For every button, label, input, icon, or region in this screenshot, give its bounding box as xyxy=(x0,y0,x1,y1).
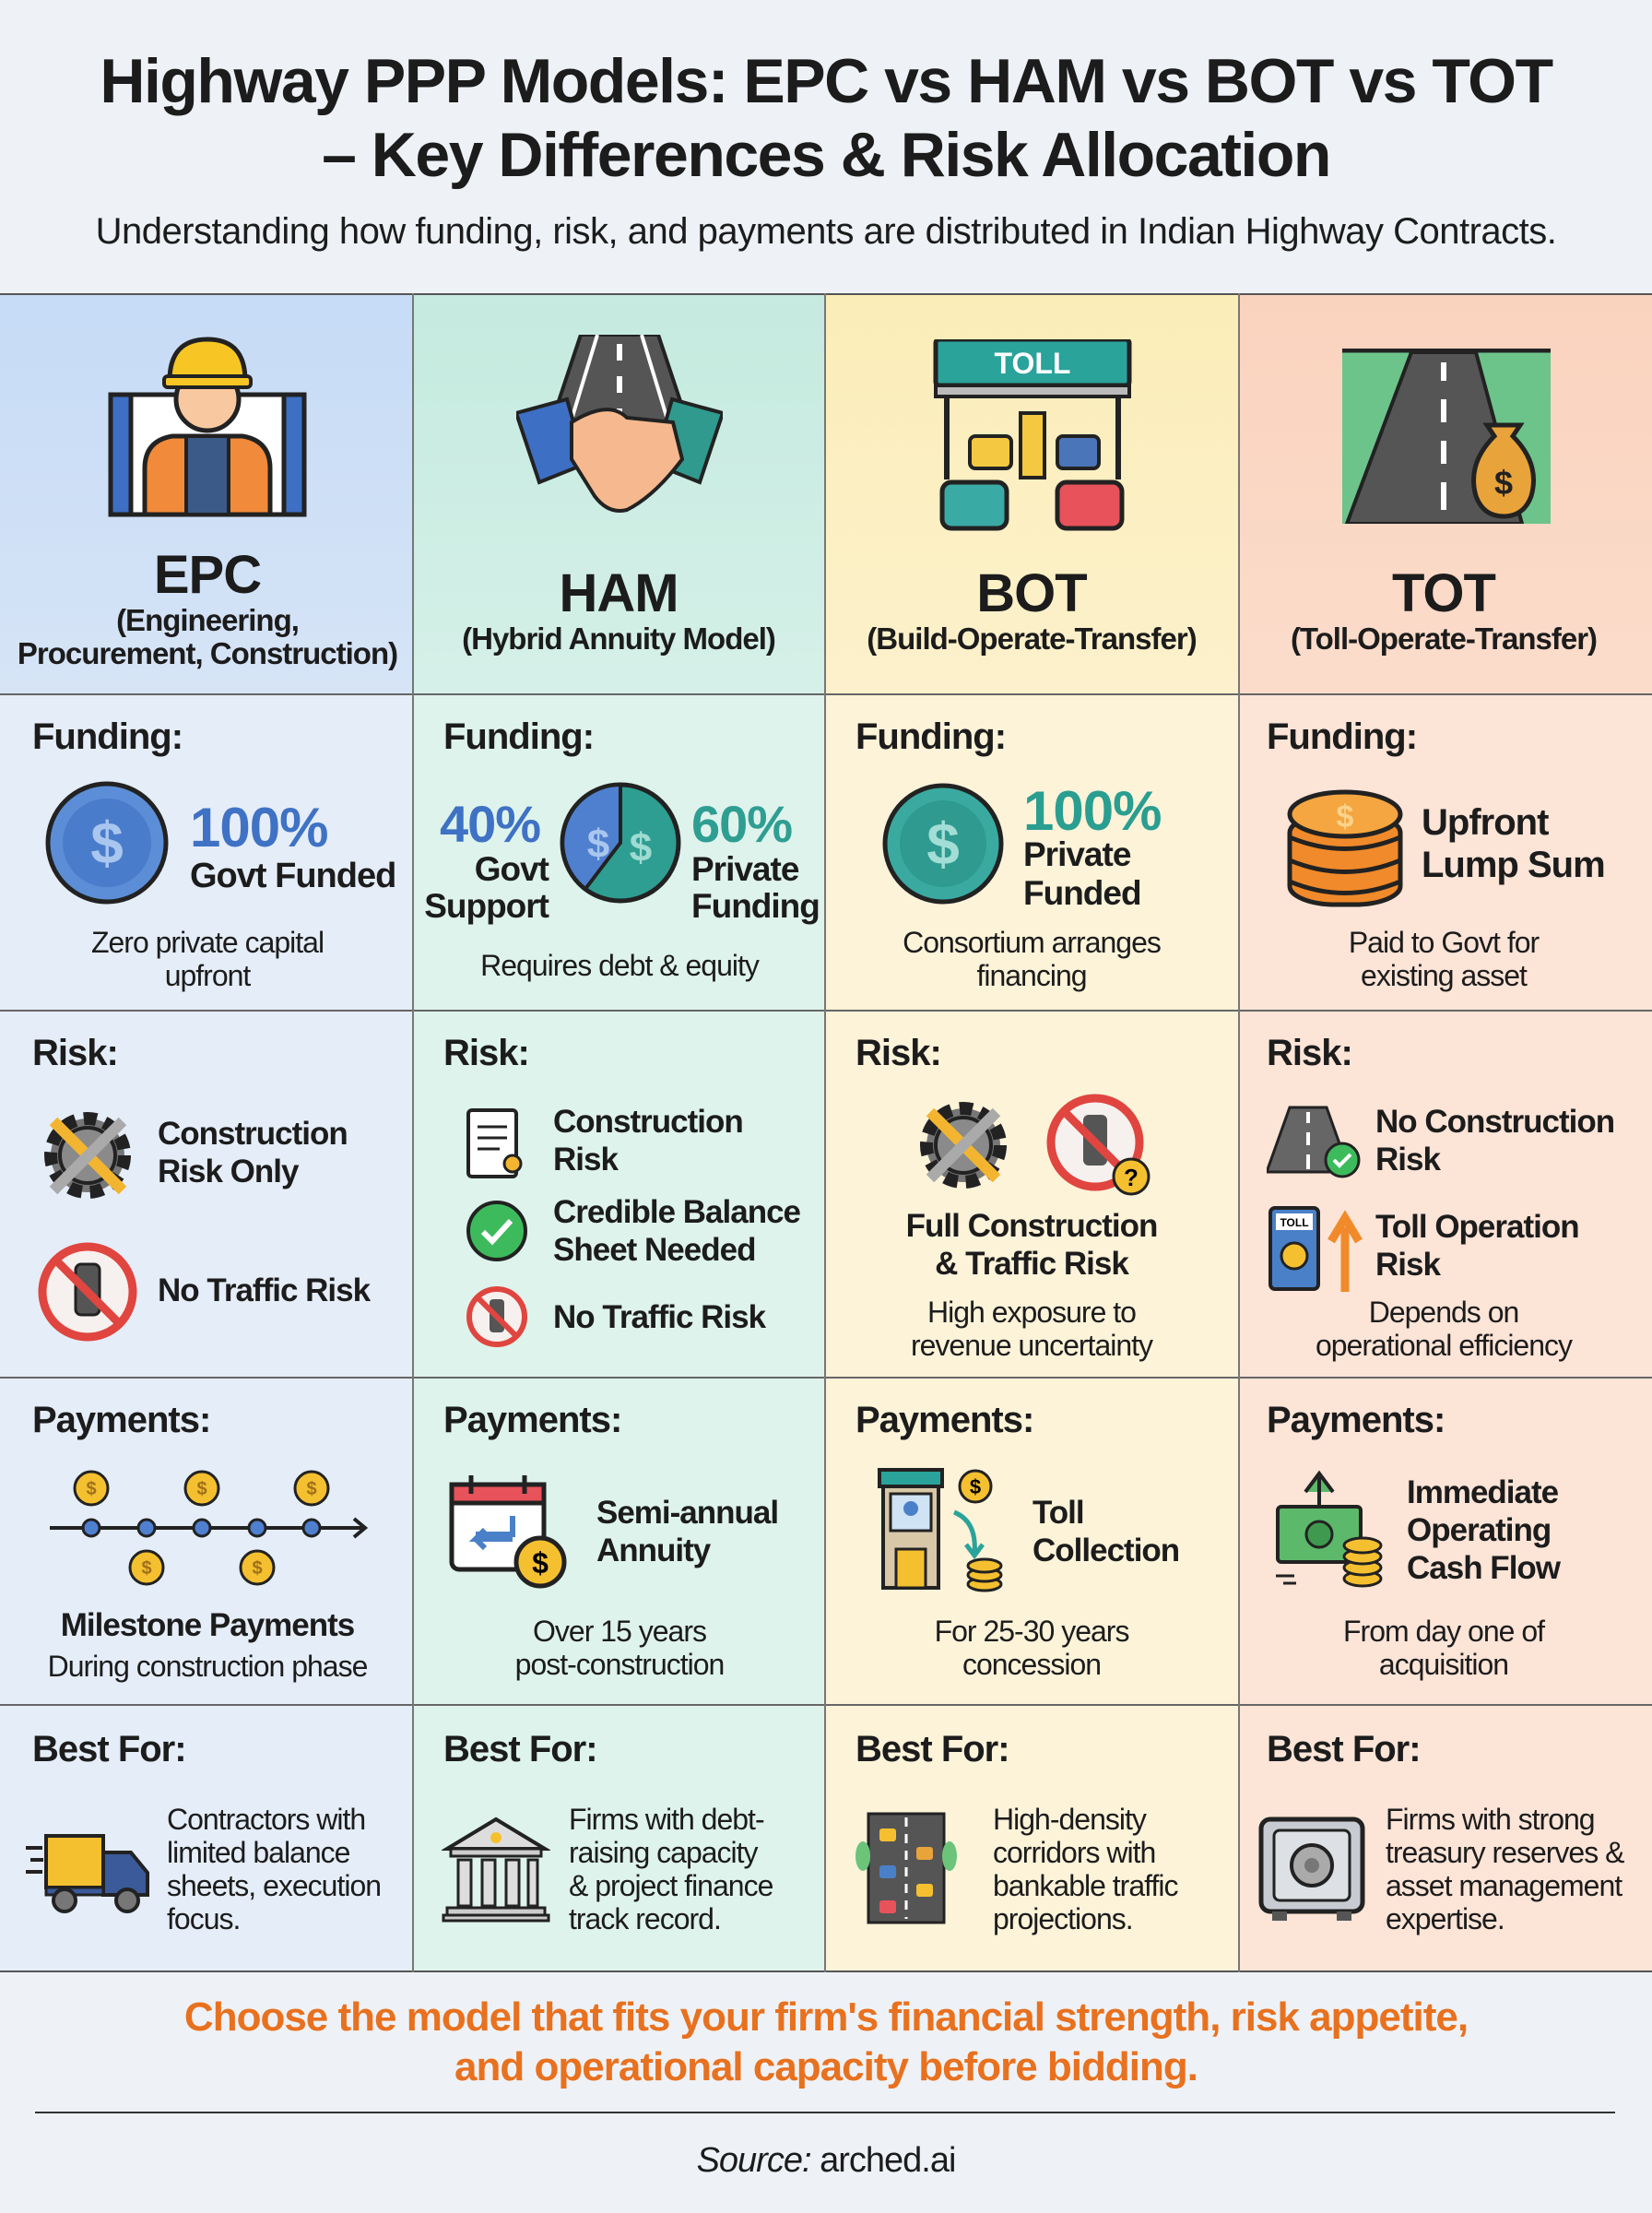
panel: EPC best for: sheets, execution xyxy=(167,1869,381,1902)
panel: EPC payments: During construction phase xyxy=(48,1650,367,1683)
panel: BOT risk xyxy=(856,1033,1157,1362)
panel: TOT best for: expertise. xyxy=(1386,1902,1504,1935)
panel: HAM best for: Firms with debt- xyxy=(569,1803,764,1836)
panel: BOT funding: 100% xyxy=(1023,780,1161,842)
panel: EPC best for: limited balance xyxy=(167,1836,349,1869)
panel: EPC funding: upfront xyxy=(165,959,250,992)
icon: blue coin xyxy=(46,782,168,904)
icon: blue coin: $ xyxy=(90,810,124,876)
panel: TOT payments: Operating xyxy=(1407,1512,1551,1548)
title: Highway PPP Models: EPC vs HAM vs BOT vs TOT xyxy=(100,46,1552,116)
callout: conclusion: Choose the model that fits your firm's financial strength, risk appetite, xyxy=(184,1994,1468,2040)
panel: TOT best for: Firms with strong xyxy=(1386,1803,1595,1836)
callout: conclusion xyxy=(184,1993,1468,2092)
icon: road with check xyxy=(1267,1106,1361,1178)
title: – Key Differences & Risk Allocation xyxy=(322,120,1330,190)
icon: coin stack: $ xyxy=(1337,799,1354,834)
panel: TOT payments: Payments: xyxy=(1267,1400,1445,1440)
column backgrounds xyxy=(0,293,1652,1972)
icon: check xyxy=(466,1201,527,1261)
panel: HAM funding xyxy=(424,716,820,982)
icon: milestone timeline: $ xyxy=(252,1558,263,1579)
panel: BOT funding: Private xyxy=(1023,835,1130,873)
panel: BOT best for: corridors with xyxy=(993,1836,1155,1869)
panel: BOT funding: Consortium arranges xyxy=(903,926,1161,959)
icon: no traffic xyxy=(466,1286,527,1347)
model full form xyxy=(18,603,397,670)
icon: pie chart 40/60 xyxy=(560,782,680,904)
panel: TOT best for: treasury reserves & xyxy=(1386,1836,1623,1869)
panel: HAM payments xyxy=(443,1400,778,1681)
panel: BOT best for: High-density xyxy=(993,1803,1146,1836)
icon: milestone timeline: $ xyxy=(196,1479,207,1499)
panel: EPC risk: Risk: xyxy=(32,1033,118,1073)
icon: milestone timeline: $ xyxy=(141,1558,152,1579)
panel: TOT funding: Upfront xyxy=(1422,802,1548,843)
panel: HAM risk: Credible Balance xyxy=(553,1194,800,1230)
icon: no traffic with question xyxy=(1047,1094,1150,1195)
icon: coin stack xyxy=(1287,789,1403,907)
panel: BOT payments: Payments: xyxy=(856,1400,1033,1440)
panel: HAM payments: Annuity xyxy=(596,1533,710,1568)
panel: TOT funding: Lump Sum xyxy=(1422,845,1605,885)
panel: EPC best for: focus. xyxy=(167,1902,240,1935)
panel: HAM payments: Over 15 years xyxy=(533,1615,706,1648)
panel: HAM best for: raising capacity xyxy=(569,1836,758,1869)
panel: HAM payments: post-construction xyxy=(515,1648,724,1681)
panel: HAM funding: Funding xyxy=(691,887,820,925)
panel: TOT risk: Toll Operation xyxy=(1375,1209,1579,1245)
model name: HAM xyxy=(559,563,678,623)
icon: toll booth collection xyxy=(878,1468,1003,1592)
panel: BOT best for: Best For: xyxy=(856,1729,1009,1769)
panel: EPC funding xyxy=(32,716,395,992)
model name: TOT xyxy=(1392,563,1495,623)
panel: EPC funding: Zero private capital xyxy=(91,926,324,959)
panel: EPC payments: Milestone Payments xyxy=(61,1607,354,1643)
model full form: (Engineering, xyxy=(116,603,299,637)
panel: BOT risk: High exposure to xyxy=(927,1296,1136,1329)
panel: HAM risk: Sheet Needed xyxy=(553,1232,755,1268)
icon: gear and tools xyxy=(920,1102,1007,1189)
panel: HAM risk xyxy=(443,1033,800,1347)
panel: EPC best for xyxy=(0,1705,413,1972)
callout: conclusion: and operational capacity before bidding. xyxy=(454,2044,1198,2089)
header: TOT xyxy=(1291,349,1597,656)
panel: TOT funding: Paid to Govt for xyxy=(1349,926,1539,959)
icon: no traffic xyxy=(39,1243,136,1341)
icon: delivery truck xyxy=(26,1825,151,1917)
icon: milestone timeline: $ xyxy=(306,1479,317,1499)
panel: BOT funding: financing xyxy=(976,959,1087,992)
panel: HAM best for: & project finance xyxy=(569,1869,773,1902)
panel: BOT funding: Funding: xyxy=(856,716,1006,757)
panel: EPC risk: Construction xyxy=(158,1116,348,1152)
icon: road handshake xyxy=(516,335,723,513)
panel: EPC best for: Contractors with xyxy=(167,1803,365,1836)
panel: HAM risk: Risk: xyxy=(443,1033,529,1073)
panel: BOT risk: Risk: xyxy=(856,1033,941,1073)
subtitle: Understanding how funding, risk, and payments are distributed in Indian Highway Contracts. xyxy=(96,211,1556,252)
panel: EPC funding: 100% xyxy=(190,797,327,858)
panel: TOT risk: Risk: xyxy=(1267,1033,1352,1073)
header: EPC xyxy=(18,337,397,670)
header: HAM xyxy=(462,335,775,656)
header: BOT xyxy=(867,339,1197,656)
icon: milestone timeline: $ xyxy=(86,1479,97,1499)
panel: TOT risk: Risk xyxy=(1375,1142,1440,1178)
icon: no traffic with question: ? xyxy=(1124,1164,1139,1191)
comparison grid xyxy=(0,293,1652,1972)
panel: EPC risk: Risk Only xyxy=(158,1154,298,1189)
panel: HAM best for: Best For: xyxy=(443,1729,597,1769)
icon: toll booth collection: $ xyxy=(970,1475,981,1498)
panel: HAM best for xyxy=(413,1705,825,1972)
panel: EPC payments: Payments: xyxy=(32,1400,210,1440)
panel: EPC funding: Govt Funded xyxy=(190,857,395,895)
panel: HAM risk: No Traffic Risk xyxy=(553,1299,765,1335)
icon: toll plaza xyxy=(933,339,1132,531)
model full form: (Hybrid Annuity Model) xyxy=(462,621,775,656)
icon: engineer with blueprint xyxy=(109,337,306,516)
icon: safe xyxy=(1257,1816,1366,1924)
model name: BOT xyxy=(976,563,1087,623)
icon: road with money bag xyxy=(1342,349,1551,524)
panel: EPC funding: Funding: xyxy=(32,716,183,757)
icon: bank xyxy=(442,1816,550,1924)
panel: TOT best for: Best For: xyxy=(1267,1729,1421,1769)
icon: document xyxy=(466,1108,522,1178)
panel: HAM best for: track record. xyxy=(569,1902,721,1935)
model full form: (Build-Operate-Transfer) xyxy=(867,621,1197,656)
panel: HAM payments: Semi-annual xyxy=(596,1495,778,1531)
panel: TOT risk: Depends on xyxy=(1369,1296,1518,1329)
panel: BOT payments: Collection xyxy=(1032,1533,1179,1568)
panel: BOT payments xyxy=(856,1400,1179,1681)
model full form: Procurement, Construction) xyxy=(18,636,397,670)
panel: HAM funding: Govt xyxy=(475,850,549,888)
panel: TOT payments: From day one of xyxy=(1343,1615,1544,1648)
icon: gear and tools xyxy=(44,1112,131,1199)
icon: toll booth with arrow: TOLL xyxy=(1280,1216,1309,1229)
panel: BOT payments: Toll xyxy=(1032,1495,1084,1531)
panel: EPC payments xyxy=(32,1400,368,1683)
icon: milestone timeline xyxy=(50,1470,368,1586)
panel: HAM risk: Risk xyxy=(553,1142,618,1178)
panel: BOT risk: & Traffic Risk xyxy=(935,1246,1128,1282)
model name: EPC xyxy=(154,545,261,605)
panel: EPC risk: No Traffic Risk xyxy=(158,1272,370,1308)
panel: TOT funding xyxy=(1267,716,1605,992)
icon: teal coin xyxy=(883,784,1003,904)
panel: TOT funding: Funding: xyxy=(1267,716,1417,757)
panel: TOT best for xyxy=(1239,1705,1652,1972)
icon: cash with arrow and coins xyxy=(1270,1470,1390,1590)
panel: TOT risk: No Construction xyxy=(1375,1104,1614,1140)
icon: highway with cars xyxy=(856,1810,957,1926)
model full form: (Toll-Operate-Transfer) xyxy=(1291,621,1597,656)
panel: HAM funding: Requires debt & equity xyxy=(480,949,759,982)
panel: TOT payments: Immediate xyxy=(1407,1474,1558,1510)
panel: BOT payments: concession xyxy=(962,1648,1101,1681)
icon: road with money bag: $ xyxy=(1494,464,1513,502)
panel: HAM funding: Private xyxy=(691,850,798,888)
panel: TOT funding: existing asset xyxy=(1361,959,1527,992)
panel: BOT risk: Full Construction xyxy=(906,1208,1157,1244)
panel: BOT best for xyxy=(825,1705,1239,1972)
panel: BOT payments: For 25-30 years xyxy=(935,1615,1128,1648)
panel: BOT best for: bankable traffic xyxy=(993,1869,1177,1902)
panel: BOT risk: revenue uncertainty xyxy=(911,1329,1152,1362)
panel: BOT funding: Funded xyxy=(1023,874,1141,912)
panel: TOT payments: Cash Flow xyxy=(1407,1550,1560,1586)
icon: calendar with coin xyxy=(450,1475,566,1588)
panel: TOT payments xyxy=(1267,1400,1561,1681)
panel: TOT risk xyxy=(1267,1033,1614,1362)
panel: HAM funding: 40% xyxy=(440,795,540,853)
icon: calendar with coin: $ xyxy=(532,1546,549,1580)
panel: EPC risk xyxy=(32,1033,371,1341)
panel: BOT best for: projections. xyxy=(993,1902,1133,1935)
icon: pie chart 40/60: $ xyxy=(587,822,609,867)
title xyxy=(100,46,1552,190)
icon: teal coin: $ xyxy=(926,811,960,877)
panel: HAM funding: Funding: xyxy=(443,716,594,757)
panel: BOT funding xyxy=(856,716,1161,992)
source: Source: arched.ai xyxy=(697,2141,955,2180)
icon: toll plaza: TOLL xyxy=(995,347,1070,380)
panel: HAM payments: Payments: xyxy=(443,1400,621,1440)
panel: TOT best for: asset management xyxy=(1386,1869,1622,1902)
panel: TOT payments: acquisition xyxy=(1379,1648,1508,1681)
icon: toll booth with arrow xyxy=(1268,1206,1363,1292)
panel: EPC best for: Best For: xyxy=(32,1729,186,1769)
panel: HAM funding: Support xyxy=(424,887,549,925)
icon: pie chart 40/60: $ xyxy=(630,825,652,870)
panel: TOT risk: Risk xyxy=(1375,1247,1440,1283)
panel: HAM risk: Construction xyxy=(553,1104,743,1140)
panel: TOT risk: operational efficiency xyxy=(1316,1329,1572,1362)
panel: HAM funding: 60% xyxy=(691,795,792,853)
